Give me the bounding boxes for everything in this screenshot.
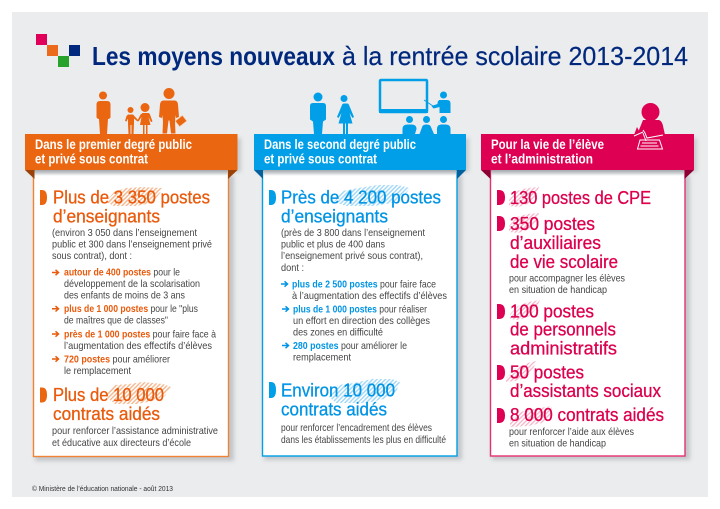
panel shadow — [264, 175, 462, 460]
heading: auxiliaries: d’auxiliaires — [510, 232, 601, 253]
bullet list: à l’augmentation des effectifs d’élèves — [292, 290, 447, 302]
heading: contracts — [53, 384, 164, 424]
heading: contracts: contrats aidés — [281, 398, 387, 420]
heading: teachers — [53, 186, 210, 226]
text block: dans les établissements les plus en difficulté — [281, 434, 446, 446]
title: Les moyens nouveaux — [92, 41, 335, 71]
banner text: Pour la vie de l’élève — [491, 137, 604, 152]
heading: teachers — [281, 186, 441, 226]
banner text: Dans le premier degré public — [35, 137, 192, 152]
text block — [52, 227, 212, 262]
banner text — [491, 137, 604, 166]
bullet list: des zones en difficulté — [293, 326, 383, 338]
panel shadow — [492, 175, 690, 460]
bullet list — [281, 278, 447, 364]
banner text — [264, 137, 416, 166]
heading: teachers: d’enseignants — [281, 206, 388, 226]
text block: pour renforcer l’encadrement des élèves — [281, 422, 432, 434]
text block: sous contrat), dont : — [52, 250, 132, 262]
ribbon folds — [25, 170, 34, 179]
heading: contracts — [281, 380, 395, 420]
bullet list — [52, 266, 216, 377]
heading: social workers: 50 postes — [510, 362, 584, 382]
text block — [509, 272, 625, 296]
banner text: et l’administration — [491, 152, 593, 166]
text block — [52, 425, 218, 449]
text block: et éducative aux directeurs d’école — [52, 437, 191, 449]
banner text: Dans le second degré public — [264, 137, 416, 152]
text block — [509, 426, 634, 450]
banner — [481, 134, 694, 170]
text block: l’enseignement privé sous contrat), — [281, 250, 423, 262]
bullet marker — [40, 190, 47, 205]
heading: contracts: Environ 10 000 — [281, 380, 395, 400]
bullet list: le remplacement — [64, 365, 131, 377]
panel shadow — [35, 175, 234, 461]
hatch highlight — [334, 185, 410, 206]
ribbon folds — [254, 170, 263, 179]
ribbon folds — [481, 170, 490, 179]
banner shadow — [28, 138, 241, 172]
heading: teachers: d’enseignants — [53, 206, 160, 226]
bullet list: autour de 400 postes pour le — [64, 266, 180, 278]
banner text — [35, 137, 192, 166]
heading: auxiliaries — [510, 213, 618, 272]
icon: blue man and woman — [310, 92, 354, 134]
icon: orange family figures — [96, 88, 187, 134]
bullet list: 280 postes pour améliorer le — [293, 340, 407, 352]
heading: contracts: Plus de 10 000 — [53, 384, 164, 405]
bullet marker — [269, 382, 276, 398]
title — [92, 41, 688, 71]
banner — [254, 134, 466, 170]
banner text: et privé sous contrat — [264, 152, 377, 166]
heading: teachers: Plus de 3 350 postes — [53, 186, 210, 208]
heading: administrative staff — [510, 300, 617, 358]
heading: contracts: contrats aidés — [53, 403, 160, 424]
text block: en situation de handicap — [509, 438, 606, 450]
bullet list: de maîtres que de classes" — [64, 314, 168, 326]
bullet marker — [40, 388, 47, 402]
text block: (près de 3 800 dans l’enseignement — [281, 227, 425, 239]
heading: teachers: Près de 4 200 postes — [281, 186, 441, 208]
bullet list: plus de 2 500 postes pour faire face — [292, 278, 436, 290]
text block: public et plus de 400 dans — [281, 238, 385, 250]
panel body — [490, 170, 685, 456]
heading: administrative staff: de personnels — [510, 318, 616, 340]
bullet list: près de 1 000 postes pour faire face à — [64, 328, 216, 340]
bullet list: remplacement — [293, 352, 351, 364]
hatch highlights — [506, 187, 552, 427]
title: à la rentrée scolaire 2013-2014 — [342, 41, 688, 71]
heading: auxiliaries: 350 postes — [510, 213, 595, 234]
text block: public et 300 dans l’enseignement privé — [52, 238, 212, 250]
icon: pink person writing — [634, 103, 665, 135]
text block — [281, 227, 425, 274]
logo — [36, 34, 80, 67]
text block: pour renforcer l’aide aux élèves — [509, 426, 634, 438]
heading: social workers — [510, 362, 662, 401]
bullet marker — [269, 190, 276, 205]
banner — [25, 134, 238, 170]
text block: en situation de handicap — [509, 284, 607, 296]
icon: blue classroom with board — [379, 80, 450, 134]
bullet list: plus de 1 000 postes pour réaliser — [293, 304, 427, 316]
bullet markers — [497, 190, 505, 423]
heading: administrative staff: 100 postes — [510, 300, 594, 322]
panel body — [34, 170, 228, 456]
bullet list: développement de la scolarisation — [64, 278, 200, 290]
hatch highlight — [328, 379, 400, 403]
bullet list: un effort en direction des collèges — [293, 315, 430, 327]
heading: social workers: d’assistants sociaux — [510, 380, 662, 401]
text block — [281, 422, 446, 446]
text block: dont : — [281, 262, 304, 274]
heading: CPE: 130 postes de CPE — [510, 187, 651, 208]
banner text: et privé sous contrat — [35, 152, 148, 166]
banner shadow — [484, 138, 697, 172]
text block: (environ 3 050 dans l’enseignement — [52, 227, 197, 239]
bullet list: 720 postes pour améliorer — [64, 354, 170, 366]
panel: primary — [25, 134, 241, 461]
hatch highlight — [105, 382, 171, 404]
copyright: © Ministère de l’éducation nationale - août 2013 — [32, 485, 173, 493]
heading: contracts: 8 000 contrats aidés — [510, 404, 664, 425]
hatch highlight — [106, 187, 162, 206]
heading: administrative staff: administratifs — [510, 338, 617, 358]
bullet list: plus de 1 000 postes pour le "plus — [64, 303, 198, 315]
panel body — [262, 170, 457, 456]
heading: auxiliaries: de vie scolaire — [510, 251, 618, 272]
text block: pour accompagner les élèves — [509, 272, 625, 284]
banner shadow — [257, 138, 469, 172]
panel: student life — [481, 130, 697, 460]
panel: secondary — [254, 134, 469, 460]
text block: pour renforcer l’assistance administrative — [52, 425, 218, 437]
bullet list: l’augmentation des effectifs d’élèves — [64, 340, 212, 352]
icon: writing sheet — [634, 130, 663, 149]
bullet list: des enfants de moins de 3 ans — [64, 290, 185, 302]
